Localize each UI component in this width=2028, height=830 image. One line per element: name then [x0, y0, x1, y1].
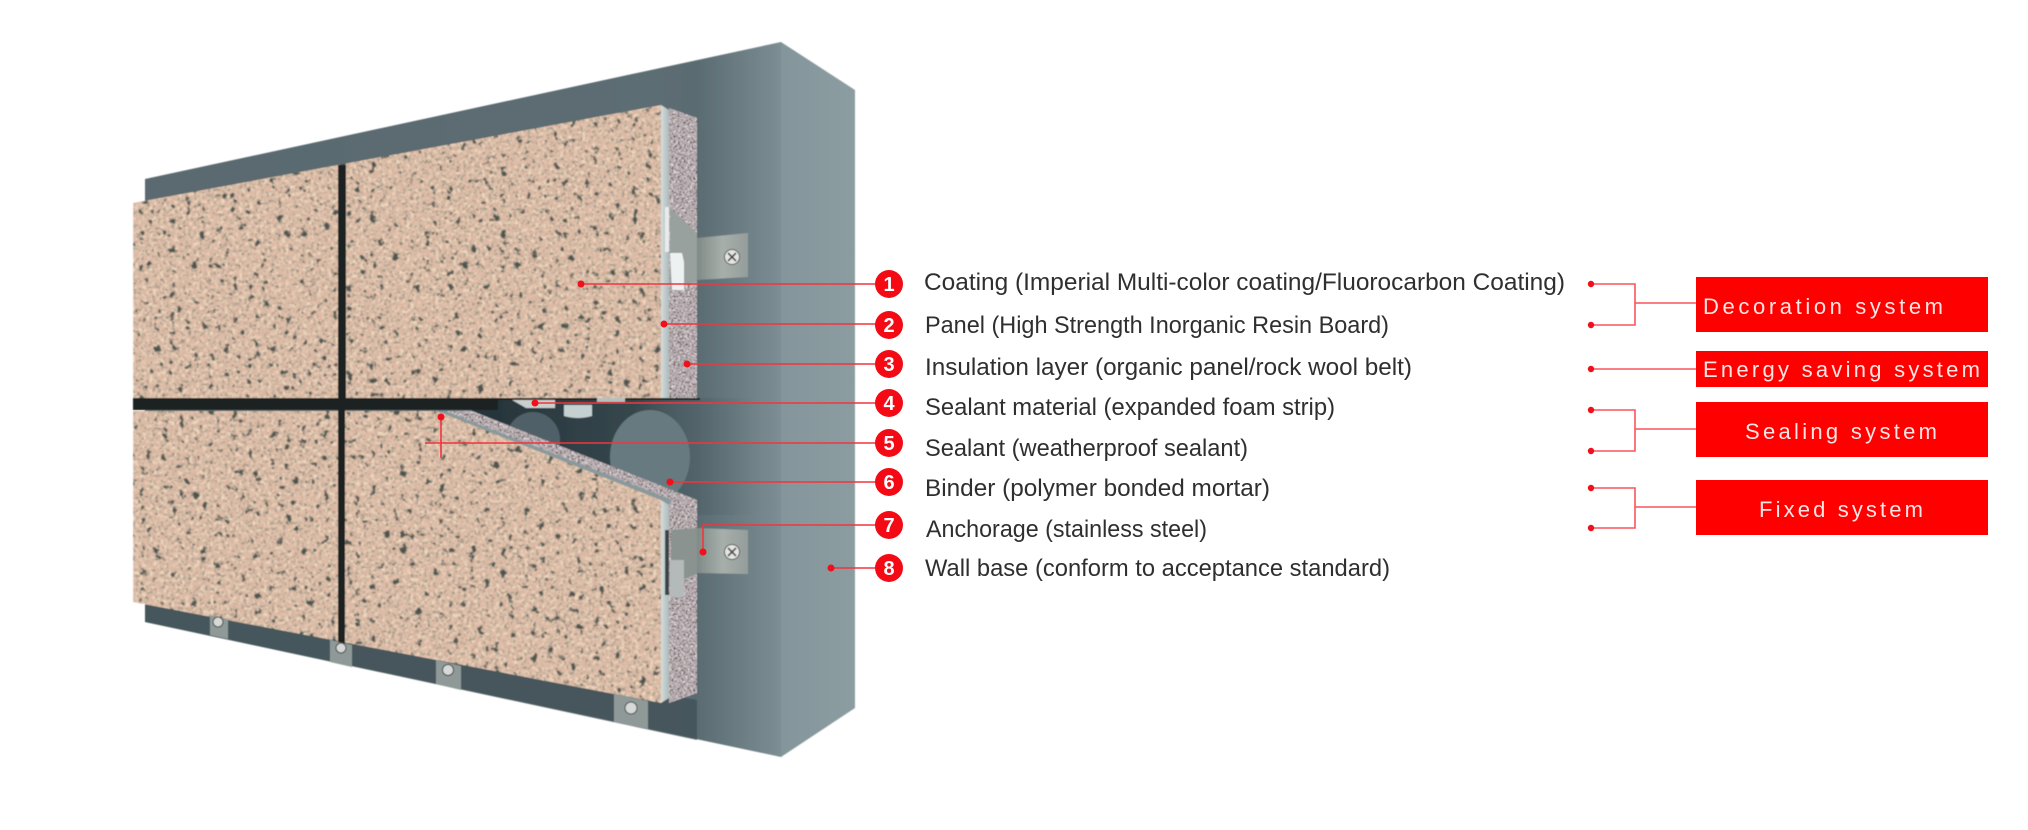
leader dots — [438, 280, 834, 572]
panel edge strips — [437, 105, 672, 703]
badge numbers: 1 — [883, 274, 895, 296]
system brackets — [1588, 281, 1696, 531]
bottom clip screws — [213, 617, 637, 714]
badge numbers: 2 — [883, 315, 895, 337]
component labels: Wall base (conform to acceptance standard) — [925, 555, 1390, 582]
upper insulation layer — [669, 108, 697, 399]
system tag: energy saving — [1696, 351, 1988, 387]
system tag: energy saving: Energy saving system — [1703, 357, 1980, 382]
gap hardware — [512, 398, 625, 418]
binder mortar dabs — [506, 410, 690, 504]
component labels: Sealant (weatherproof sealant) — [925, 435, 1248, 462]
system tag: decoration: Decoration system — [1703, 294, 1943, 319]
wall base block — [145, 42, 855, 757]
component labels: Insulation layer (organic panel/rock wool belt) — [925, 354, 1412, 381]
component labels: Anchorage (stainless steel) — [926, 516, 1207, 543]
granite coated panels — [133, 100, 663, 705]
black joints — [133, 165, 700, 653]
badge numbers: 7 — [883, 515, 895, 537]
upper anchor bracket — [665, 207, 748, 290]
leader lines — [425, 284, 880, 568]
dark cavity behind the cut panel — [470, 398, 770, 515]
badge numbers: 5 — [883, 433, 895, 455]
system tag: fixed — [1696, 480, 1988, 535]
badge numbers: 3 — [883, 354, 895, 376]
leader lines and numbered markers — [425, 270, 903, 582]
badge numbers: 4 — [883, 393, 895, 415]
component labels: Sealant material (expanded foam strip) — [925, 394, 1335, 421]
bracket lines — [1591, 284, 1696, 528]
system tag: fixed: Fixed system — [1759, 497, 1923, 522]
system tag: sealing — [1696, 402, 1988, 457]
component labels: Panel (High Strength Inorganic Resin Board) — [925, 312, 1389, 339]
lower insulation layer — [437, 411, 697, 703]
system tag: sealing: Sealing system — [1745, 419, 1937, 444]
component labels: Binder (polymer bonded mortar) — [925, 475, 1270, 502]
wall cutaway illustration — [133, 42, 855, 757]
lower anchor bracket — [665, 528, 748, 597]
infographic canvas — [132, 42, 1988, 758]
badge numbers: 6 — [883, 472, 895, 494]
component labels: Coating (Imperial Multi-color coating/Fluorocarbon Coating) — [924, 269, 1565, 296]
system tag: decoration — [1696, 277, 1988, 332]
bottom edge clips — [210, 615, 648, 729]
number badges — [875, 270, 903, 582]
component labels — [924, 269, 1565, 582]
bracket dots — [1588, 281, 1594, 531]
badge numbers: 8 — [883, 558, 895, 580]
badge numbers — [883, 274, 895, 580]
